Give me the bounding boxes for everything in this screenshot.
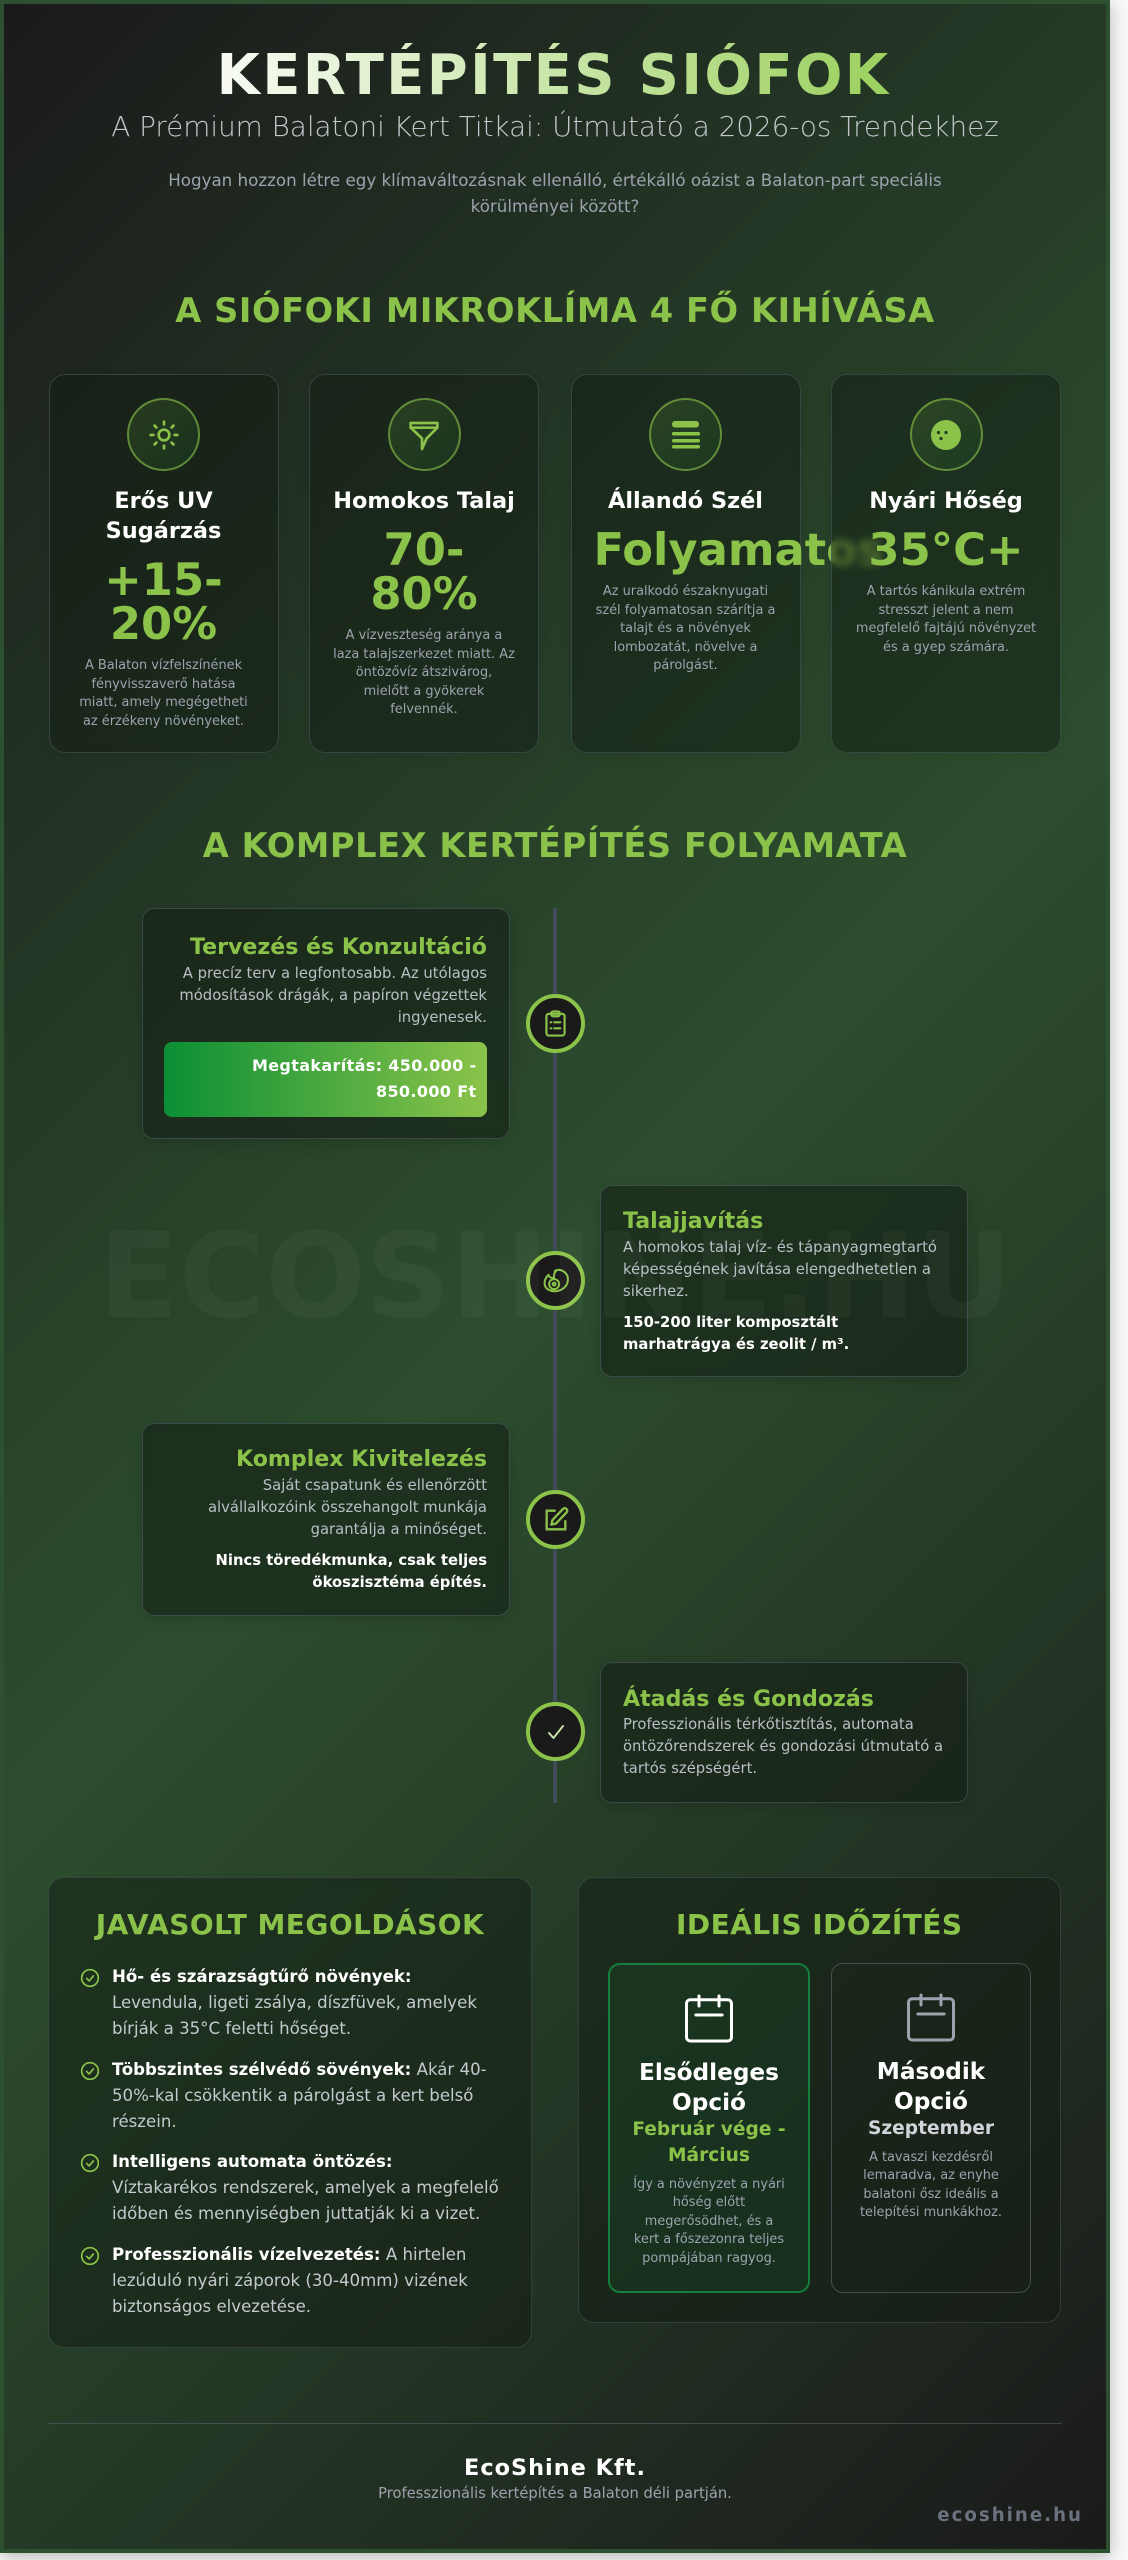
- option title: [877, 2058, 986, 2114]
- description: A vízveszteség aránya a: [346, 628, 502, 643]
- timeline node 1: clipboard: [526, 994, 585, 1053]
- card title: Sugárzás: [106, 518, 221, 544]
- statistic: 20%: [110, 596, 217, 650]
- panel title: JAVASOLT MEGOLDÁSOK: [96, 1908, 484, 1940]
- option title: Elsődleges: [639, 2059, 779, 2086]
- solution 3: Intelligens automata öntözés:: [112, 2152, 393, 2171]
- timeline step 1: [142, 908, 510, 1139]
- step title: Átadás és Gondozás: [623, 1686, 874, 1712]
- solution 1: [80, 1967, 477, 2038]
- footer divider: [48, 2423, 1062, 2424]
- option date: [632, 2119, 786, 2166]
- option text: balatoni ősz ideális a: [863, 2186, 999, 2202]
- solution 2: részein.: [112, 2112, 177, 2130]
- intro text: [168, 170, 942, 216]
- step highlight: 150-200 liter komposztált: [623, 1314, 838, 1331]
- description: [333, 628, 515, 717]
- statistic: +15-: [104, 552, 223, 606]
- solution 4: [80, 2244, 468, 2316]
- description: A tartós kánikula extrém: [867, 584, 1025, 599]
- step text: A precíz terv a legfontosabb. Az utólagos: [183, 964, 487, 982]
- description: [856, 584, 1036, 654]
- step text: A homokos talaj víz- és tápanyagmegtartó: [623, 1239, 937, 1256]
- option text: A tavaszi kezdésről: [869, 2150, 993, 2164]
- solution 2: [80, 2060, 487, 2130]
- description: és a gyep számára.: [883, 640, 1009, 654]
- option title: [639, 2059, 779, 2116]
- brand url: ecoshine.hu: [937, 2505, 1083, 2526]
- timeline node 3: edit: [526, 1490, 585, 1549]
- description: fényvisszaverő hatása: [91, 676, 236, 692]
- option: primary: [608, 1963, 810, 2293]
- statistic: 70-: [384, 522, 464, 576]
- statistic: 35°C+: [868, 522, 1024, 576]
- panel: recommended solutions: [48, 1877, 532, 2348]
- description: mielőtt a gyökerek: [364, 684, 484, 698]
- statistic: Folyamatos: [594, 522, 884, 576]
- step text: képességének javítása elengedhetetlen a: [623, 1261, 931, 1278]
- description: lombozatát, növelve a: [614, 640, 757, 654]
- icon: calendar: [685, 1994, 733, 2042]
- heading: challenges: A SIÓFOKI MIKROKLÍMA 4 FŐ KIHÍVÁSA: [175, 291, 935, 330]
- step text: garantálja a minőséget.: [311, 1521, 487, 1538]
- step text: [179, 964, 487, 1026]
- timeline node 4: check: [526, 1702, 585, 1761]
- panel: ideal timing: [578, 1877, 1061, 2323]
- description: Az uralkodó északnyugati: [603, 584, 768, 599]
- solution 3: Víztakarékos rendszerek, amelyek a megfelelő: [112, 2178, 499, 2197]
- panel title: IDEÁLIS IDŐZÍTÉS: [676, 1908, 962, 1940]
- panel: sandy soil challenge: [309, 374, 539, 753]
- solution 1: bírják a 35°C feletti hőséget.: [112, 2019, 351, 2038]
- icon: calendar: [907, 1994, 955, 2042]
- step text: öntözőrendszerek és gondozási útmutató a: [623, 1738, 943, 1755]
- solution 1: Levendula, ligeti zsálya, díszfüvek, amelyek: [112, 1993, 477, 2012]
- step text: ingyenesek.: [398, 1009, 487, 1026]
- heading: process: A KOMPLEX KERTÉPÍTÉS FOLYAMATA: [203, 826, 907, 865]
- option date: Február vége -: [632, 2119, 786, 2140]
- solution 2: Többszintes szélvédő sövények: Akár 40-: [112, 2060, 487, 2078]
- step text: [623, 1716, 943, 1777]
- option text: kert a főszezonra teljes: [634, 2232, 784, 2247]
- option date: Szeptember: [868, 2118, 994, 2139]
- savings callout: Megtakarítás: 450.000 -: [252, 1056, 476, 1075]
- step text: alvállalkozóink összehangolt munkája: [208, 1499, 487, 1516]
- step title: Talajjavítás: [623, 1208, 763, 1234]
- step text: módosítások drágák, a papíron végzettek: [179, 987, 487, 1004]
- timeline step 4: [600, 1662, 968, 1803]
- step text: [208, 1477, 487, 1538]
- description: [596, 584, 775, 673]
- card title: Homokos Talaj: [333, 488, 515, 514]
- step text: [623, 1239, 937, 1300]
- step highlight: [216, 1552, 487, 1591]
- step highlight: ökoszisztéma építés.: [312, 1574, 487, 1591]
- option text: Így a növényzet a nyári: [633, 2176, 785, 2192]
- description: párolgást.: [653, 658, 718, 673]
- step text: Saját csapatunk és ellenőrzött: [263, 1477, 487, 1494]
- statistic: 80%: [370, 566, 478, 620]
- step text: sikerhez.: [623, 1283, 689, 1300]
- option text: [860, 2150, 1002, 2220]
- footer tagline: Professzionális kertépítés a Balaton déli partján.: [378, 2485, 732, 2502]
- icon: funnel: [388, 398, 460, 471]
- panel: UV challenge: [48, 374, 278, 753]
- description: megfelelő fajtájú növényzet: [856, 621, 1036, 636]
- step text: tartós szépségért.: [623, 1760, 757, 1777]
- description: stresszt jelent a nem: [878, 602, 1014, 618]
- option text: lemaradva, az enyhe: [863, 2168, 999, 2183]
- option: secondary: [831, 1963, 1031, 2293]
- watermark: ECOSHINE.HU: [98, 1206, 1012, 1344]
- solution 1: Hő- és szárazságtűrő növények:: [112, 1967, 412, 1986]
- timeline axis: [553, 908, 557, 1803]
- description: felvennék.: [390, 702, 458, 717]
- card title: Erős UV: [114, 488, 213, 514]
- title: KERTÉPÍTÉS SIÓFOK: [216, 43, 890, 108]
- timeline node 2: spiral: [526, 1251, 585, 1310]
- description: talajt és a növények: [620, 621, 751, 636]
- solution 4: Professzionális vízelvezetés: A hirtelen: [112, 2244, 466, 2264]
- solution 2: 50%-kal csökkentik a párolgást a kert belső: [112, 2086, 473, 2104]
- step text: Professzionális térkőtisztítás, automata: [623, 1716, 914, 1733]
- description: öntözővíz átszivárog,: [356, 665, 492, 680]
- solution 3: [80, 2152, 499, 2223]
- step highlight: Nincs töredékmunka, csak teljes: [216, 1552, 487, 1569]
- step highlight: [623, 1314, 849, 1353]
- step title: Komplex Kivitelezés: [236, 1446, 487, 1472]
- icon: wind bars: [649, 398, 722, 471]
- option text: hőség előtt: [673, 2195, 745, 2210]
- step title: Tervezés és Konzultáció: [190, 934, 487, 960]
- description: A Balaton vízfelszínének: [85, 658, 242, 673]
- icon: hot sun disc: [910, 398, 982, 471]
- timeline step 3: [142, 1423, 510, 1616]
- option date: Március: [668, 2145, 750, 2166]
- option text: [633, 2176, 785, 2266]
- savings callout: 850.000 Ft: [376, 1082, 476, 1101]
- option text: telepítési munkákhoz.: [860, 2205, 1002, 2220]
- panel: wind challenge: [570, 374, 800, 753]
- card title: [106, 488, 221, 544]
- step highlight: marhatrágya és zeolit / m³.: [623, 1336, 849, 1353]
- option title: Második: [877, 2058, 985, 2085]
- solution 4: lezúduló nyári záporok (30-40mm) vizének: [112, 2270, 468, 2290]
- subtitle: A Prémium Balatoni Kert Titkai: Útmutató a 2026-os Trendekhez: [111, 110, 999, 143]
- icon: sun: [127, 398, 200, 471]
- description: laza talajszerkezet miatt. Az: [333, 646, 515, 662]
- description: [79, 658, 248, 728]
- solution 3: időben és mennyiségben juttatják ki a vizet.: [112, 2204, 480, 2223]
- savings callout: [164, 1042, 487, 1117]
- panel: heat challenge: [831, 374, 1061, 753]
- option text: megerősödhet, és a: [645, 2214, 773, 2228]
- description: az érzékeny növényeket.: [83, 714, 244, 728]
- card title: Nyári Hőség: [869, 488, 1023, 514]
- solution 4: biztonságos elvezetése.: [112, 2296, 311, 2316]
- option title: Opció: [894, 2088, 968, 2114]
- option text: pompájában ragyog.: [642, 2250, 776, 2266]
- intro text: körülményei között?: [471, 196, 639, 216]
- option title: Opció: [672, 2088, 746, 2116]
- description: szél folyamatosan szárítja a: [596, 602, 775, 618]
- statistic: [104, 552, 223, 650]
- description: miatt, amely megégetheti: [79, 695, 248, 710]
- card title: Állandó Szél: [608, 488, 763, 514]
- statistic: [370, 522, 478, 620]
- timeline step 2: [600, 1185, 968, 1377]
- footer company name: EcoShine Kft.: [464, 2455, 646, 2481]
- intro text: Hogyan hozzon létre egy klímaváltozásnak ellenálló, értékálló oázist a Balaton-part speciális: [168, 170, 942, 190]
